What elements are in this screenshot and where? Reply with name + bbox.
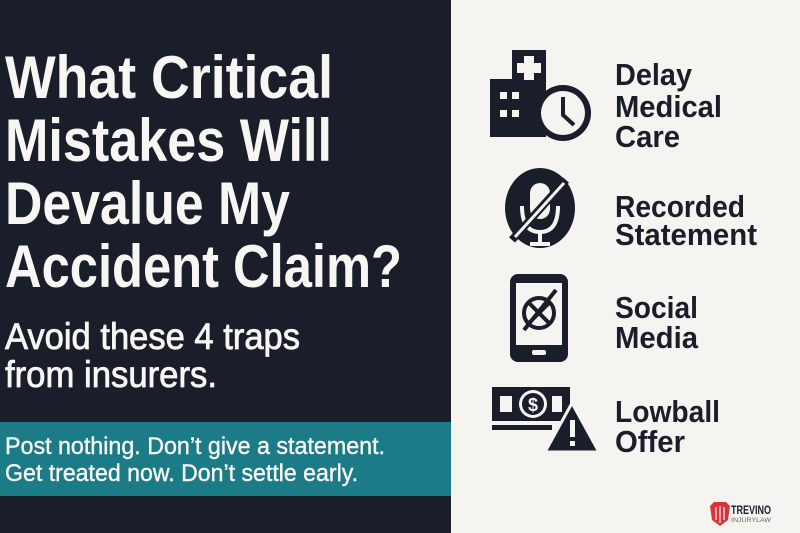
callout band bbox=[0, 422, 451, 496]
icon: money with warning: $ bbox=[528, 395, 538, 415]
labels: Lowball bbox=[615, 394, 720, 429]
subtitle: Avoid these 4 traps bbox=[5, 316, 300, 357]
panel: left dark bbox=[0, 0, 451, 533]
logo: INJURYLAW bbox=[731, 518, 771, 524]
labels: Social bbox=[615, 290, 698, 325]
labels: Offer bbox=[615, 424, 685, 459]
icon: hospital clock bbox=[490, 50, 591, 141]
labels: Statement bbox=[615, 217, 757, 252]
labels: Recorded bbox=[615, 189, 745, 224]
labels: Media bbox=[615, 320, 699, 355]
labels: Care bbox=[615, 119, 680, 154]
callout band: Get treated now. Don’t settle early. bbox=[5, 460, 358, 487]
title: Devalue My bbox=[5, 170, 291, 237]
title: Accident Claim? bbox=[5, 233, 402, 300]
icon: phone bbox=[510, 274, 568, 362]
title bbox=[5, 44, 402, 300]
title: What Critical bbox=[5, 44, 333, 111]
logo bbox=[710, 502, 771, 526]
subtitle: from insurers. bbox=[5, 354, 217, 395]
logo: TREVINO bbox=[731, 503, 771, 517]
title: Mistakes Will bbox=[5, 107, 332, 174]
subtitle bbox=[5, 316, 300, 395]
labels: Medical bbox=[615, 89, 722, 124]
callout band: Post nothing. Don’t give a statement. bbox=[5, 433, 385, 460]
icon: muted microphone bbox=[505, 168, 575, 248]
labels: Delay bbox=[615, 57, 693, 92]
labels bbox=[615, 57, 757, 459]
icon: money with warning bbox=[492, 387, 599, 452]
